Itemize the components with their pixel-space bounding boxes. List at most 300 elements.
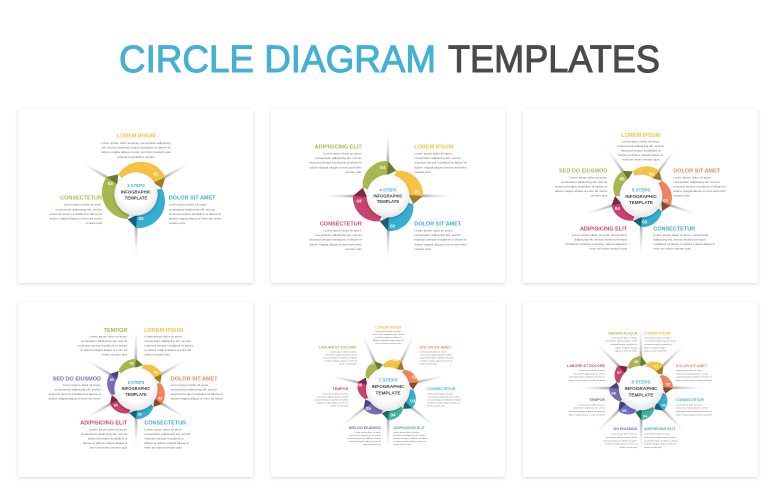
- text block: lorem ipsum: Lorem ipsum dolor sit amet,: [644, 336, 671, 339]
- text block: magna aliqua: labore et dolore magna: [615, 346, 638, 349]
- step numbers: 03: [662, 403, 666, 407]
- text block: lorem ipsum: Lorem ipsum dolor sit amet,: [622, 140, 660, 144]
- text block: lorem ipsum: LOREM IPSUM: [644, 332, 670, 336]
- text block: lorem ipsum: [414, 144, 467, 174]
- circle diagram: 7 steps: [325, 328, 449, 450]
- step numbers: 01: [154, 371, 158, 375]
- text block: consectetur: Lorem ipsum dolor sit amet,: [324, 228, 362, 232]
- text block: adipisicing elit: adipiscing elit, sed do eiusmod tempor: [574, 238, 627, 242]
- text block: dolor sit amet: Lorem ipsum dolor sit amet,: [676, 369, 703, 372]
- center label: [122, 380, 150, 397]
- text block: lorem ipsum: [644, 332, 677, 353]
- text block: dolor sit amet: Lorem ipsum dolor sit amet,: [673, 175, 712, 179]
- text block: dolor sit amet: DOLOR SIT AMET: [676, 364, 708, 368]
- step numbers: 05: [622, 409, 626, 413]
- text block: sed do eiusmod: eiusmod tempor incididunt ut labore: [347, 437, 382, 440]
- text block: sed do eiusmod: Lorem ipsum dolor sit amet,: [355, 431, 381, 434]
- segment 03: [129, 389, 153, 449]
- segment 02: [385, 361, 449, 395]
- text block: dolor sit amet: DOLOR SIT AMET: [169, 196, 216, 202]
- text block: adipisicing elit: consectetur adipiscing elit, sed do: [81, 432, 128, 436]
- text block: dolor sit amet: dolore magna aliqua ut enim ad minim: [676, 379, 712, 382]
- center label: TEMPLATE: [376, 390, 400, 396]
- text block: labore et dolore: minim veniam quis: [339, 363, 357, 365]
- segment 03: [66, 155, 145, 222]
- text block: adipisicing elit: [393, 426, 428, 446]
- step numbers: 01: [649, 171, 655, 176]
- text block: labore et dolore: eiusmod tempor incididunt ut labore et: [569, 376, 605, 379]
- segment 07: [348, 331, 394, 396]
- text block: lorem ipsum: eiusmod tempor incididunt ut labore et: [414, 161, 467, 165]
- text block: consectetur: eiusmod tempor incididunt ut labore et: [50, 212, 102, 216]
- step numbers: 04: [643, 414, 648, 418]
- text block: adipisicing elit: enim ad minim veniam quis: [590, 246, 627, 250]
- segment 05: [588, 142, 647, 208]
- center label: TEMPLATE: [125, 392, 147, 397]
- step numbers: 03: [108, 181, 113, 186]
- text block: dolor sit amet: dolore magna aliqua ut enim ad minim: [414, 242, 467, 246]
- text block: tempor: Lorem ipsum dolor sit amet,: [89, 335, 127, 339]
- text block: dolor sit amet: DOLOR SIT AMET: [414, 221, 462, 227]
- center label: INFOGRAPHIC: [625, 386, 658, 391]
- text block: sed do eiusmod: SED DO EIUSMOD: [349, 426, 381, 430]
- text block: do eiusmod: consectetur adipiscing elit, sed do: [605, 436, 638, 439]
- step numbers: 04: [615, 206, 620, 211]
- text block: consectetur: enim ad minim veniam quis: [144, 445, 182, 449]
- text block: sed do eiusmod: veniam quis: [591, 193, 608, 197]
- text block: lorem ipsum: consectetur adipiscing elit, sed do: [144, 339, 191, 343]
- step numbers: 03: [356, 199, 362, 204]
- text block: lorem ipsum: Lorem ipsum dolor sit amet,: [144, 335, 183, 339]
- text block: adipisicing elit: eiusmod tempor incididunt ut labore et: [309, 161, 362, 165]
- text block: consectetur: Lorem ipsum dolor sit amet,: [427, 392, 454, 395]
- text block: labore et dolore: LABORE ET DOLORE: [319, 345, 357, 349]
- circle diagram: 8 steps: [577, 324, 705, 452]
- text block: adipisicing elit: Lorem ipsum dolor sit amet,: [89, 427, 127, 431]
- text block: adipisicing elit: eiusmod tempor incididunt ut labore: [644, 439, 679, 442]
- segment 03: [384, 377, 445, 432]
- text block: sed do eiusmod: [49, 377, 101, 400]
- text block: sed do eiusmod: [555, 169, 608, 197]
- text block: do eiusmod: et dolore magna aliqua ut enim ad: [605, 443, 638, 446]
- text block: adipisicing elit: eiusmod tempor incididunt ut labore: [393, 437, 428, 440]
- text block: labore et dolore: consectetur adipiscing elit, sed do: [325, 353, 357, 356]
- step numbers: 03: [642, 220, 648, 225]
- circle diagram: 3 steps: [66, 137, 196, 258]
- step numbers: 07: [369, 361, 375, 366]
- text block: consectetur: CONSECTETUR: [427, 387, 456, 391]
- text block: consectetur: veniam quis: [85, 221, 102, 225]
- center label: [372, 378, 405, 396]
- step numbers: 01: [654, 364, 658, 368]
- text block: dolor sit amet: [169, 196, 222, 225]
- step numbers: [110, 362, 162, 417]
- title: CIRCLE DIAGRAM: [119, 39, 436, 81]
- text block: consectetur: eiusmod tempor incididunt ut labore et: [309, 238, 362, 242]
- step numbers: [615, 171, 669, 225]
- segment 04: [81, 383, 145, 434]
- panel: 7 steps: [271, 302, 505, 477]
- step numbers: 04: [114, 404, 118, 408]
- step numbers: 07: [617, 371, 621, 375]
- circle diagram: 6 steps: [75, 329, 197, 449]
- text block: labore et dolore: [567, 364, 606, 382]
- text block: consectetur: incididunt ut labore et dolore magna aliqua ut: [653, 242, 715, 246]
- text block: consectetur: consectetur adipiscing elit, sed do: [144, 432, 191, 436]
- step numbers: 01: [153, 172, 159, 177]
- text block: tempor: minim veniam quis: [102, 353, 128, 357]
- step numbers: 04: [390, 413, 396, 418]
- text block: lorem ipsum: labore et dolore magna aliqua ut: [373, 339, 404, 342]
- center circle: [114, 172, 158, 216]
- text block: consectetur: [309, 221, 362, 251]
- text block: lorem ipsum: eiusmod tempor incididunt ut: [621, 149, 661, 153]
- segment 07: [586, 339, 645, 397]
- segment 05: [592, 384, 650, 443]
- text block: lorem ipsum: consectetur adipiscing elit, sed do: [372, 333, 405, 336]
- panel: 5 steps: [523, 109, 758, 283]
- segment 04: [581, 188, 647, 235]
- text block: dolor sit amet: veniam quis: [169, 221, 186, 225]
- panel: 4 steps: [271, 109, 505, 283]
- text block: do eiusmod: eiusmod tempor incididunt ut labore: [603, 439, 638, 442]
- text block: tempor: TEMPOR: [104, 328, 127, 334]
- text block: lorem ipsum: consectetur adipiscing elit, sed do: [617, 144, 664, 148]
- text block: do eiusmod: DO EIUSMOD: [614, 427, 638, 431]
- segment 03: [637, 379, 696, 437]
- text block: dolor sit amet: eiusmod tempor incididunt ut labore et: [414, 238, 467, 242]
- segment 02: [639, 176, 706, 222]
- circle diagram: 5 steps: [581, 134, 706, 257]
- segment 04: [635, 388, 654, 452]
- text block: consectetur: CONSECTETUR: [60, 196, 102, 202]
- text block: adipisicing elit: [80, 421, 128, 449]
- text block: consectetur: [50, 196, 102, 225]
- text block: sed do eiusmod: minim veniam quis: [363, 444, 381, 446]
- text block: sed do eiusmod: dolore magna aliqua ut enim ad minim: [555, 189, 608, 193]
- step numbers: 08: [634, 360, 638, 364]
- panel: 8 steps: [523, 302, 758, 477]
- text block: labore et dolore: Lorem ipsum dolor sit amet,: [579, 369, 605, 372]
- step numbers: 06: [130, 362, 134, 366]
- step numbers: 05: [110, 378, 114, 382]
- step numbers: 02: [663, 198, 669, 203]
- text block: lorem ipsum: labore et dolore magna: [644, 346, 667, 349]
- text block: tempor: [78, 328, 128, 357]
- text block: dolor sit amet: DOLOR SIT AMET: [420, 345, 452, 349]
- center circle: [114, 367, 158, 411]
- text block: lorem ipsum: LOREM IPSUM: [117, 134, 156, 140]
- text block: consectetur: minim veniam quis: [427, 405, 445, 407]
- text block: lorem ipsum: [372, 326, 405, 345]
- text block: adipisicing elit: minim veniam quis: [393, 444, 411, 446]
- step numbers: 02: [158, 397, 162, 401]
- text block: lorem ipsum: dolore magna aliqua ut enim ad minim: [414, 165, 467, 169]
- title: TEMPLATES: [448, 39, 660, 81]
- text block: lorem ipsum: eiusmod tempor incididunt ut labore: [144, 344, 194, 348]
- text block: adipisicing elit: [644, 427, 679, 449]
- step numbers: 02: [666, 382, 670, 386]
- step numbers: 01: [393, 357, 399, 362]
- segment 01: [388, 171, 453, 204]
- text block: consectetur: CONSECTETUR: [676, 398, 704, 402]
- text block: sed do eiusmod: consectetur adipiscing elit, sed do: [349, 434, 382, 437]
- center label: TEMPLATE: [629, 393, 653, 398]
- center label: 5 STEPS: [632, 188, 650, 192]
- text block: dolor sit amet: veniam quis: [414, 247, 431, 251]
- text block: tempor: consectetur adipiscing elit, sed do: [316, 395, 349, 398]
- center label: 7 STEPS: [378, 378, 398, 382]
- text block: dolor sit amet: DOLOR SIT AMET: [673, 169, 721, 175]
- text block: tempor: eiusmod tempor incididunt ut labore et: [569, 410, 605, 413]
- text block: tempor: consectetur adipiscing elit, sed do: [573, 407, 606, 410]
- text block: adipisicing elit: consectetur adipiscing elit, sed do: [393, 434, 426, 437]
- step numbers: 03: [138, 413, 142, 417]
- text block: lorem ipsum: dolore magna aliqua ut enim ad minim veniam quis: [101, 150, 171, 154]
- text block: lorem ipsum: veniam quis: [414, 170, 431, 174]
- step numbers: 02: [412, 374, 418, 379]
- segment 03: [633, 196, 662, 257]
- text block: dolor sit amet: DOLOR SIT AMET: [171, 377, 218, 383]
- text block: consectetur: labore et dolore magna aliqua ut: [144, 441, 189, 445]
- text block: labore et dolore: et dolore magna aliqua ut enim ad: [324, 359, 358, 362]
- segment 04: [382, 389, 403, 450]
- step numbers: [356, 165, 420, 228]
- segment 05: [75, 353, 139, 404]
- text block: consectetur: et dolore magna aliqua ut enim ad: [427, 401, 460, 404]
- segment 01: [624, 134, 683, 201]
- text block: consectetur: Lorem ipsum dolor sit amet,: [144, 427, 183, 431]
- text block: lorem ipsum: LOREM IPSUM: [375, 326, 401, 330]
- text block: labore et dolore: [319, 345, 358, 365]
- segment 02: [641, 375, 705, 394]
- text block: dolor sit amet: consectetur adipiscing elit, sed do: [673, 180, 720, 184]
- text block: lorem ipsum: enim ad minim veniam quis: [622, 158, 660, 162]
- step numbers: 05: [366, 406, 371, 411]
- text block: magna aliqua: consectetur adipiscing elit, sed do: [605, 340, 638, 343]
- text block: sed do eiusmod: eiusmod tempor incididunt ut labore et: [49, 392, 101, 396]
- step numbers: 05: [619, 176, 625, 181]
- center label: TEMPLATE: [125, 195, 148, 200]
- text block: adipisicing elit: ADIPISICING ELIT: [393, 426, 426, 430]
- text block: lorem ipsum: Lorem ipsum dolor sit amet, consectetur adipiscing: [101, 141, 171, 145]
- text block: adipisicing elit: enim ad minim veniam quis: [90, 445, 128, 449]
- text block: labore et dolore: eiusmod tempor incididunt ut labore: [323, 356, 358, 359]
- text block: sed do eiusmod: Lorem ipsum dolor sit amet,: [569, 175, 607, 179]
- text block: lorem ipsum: aliqua ut enim ad minim: [644, 350, 667, 353]
- step numbers: 02: [138, 216, 144, 221]
- text block: adipisicing elit: veniam quis: [345, 170, 362, 174]
- text block: dolor sit amet: consectetur adipiscing elit, sed do: [414, 233, 461, 237]
- center label: [625, 188, 658, 205]
- text block: adipisicing elit: Lorem ipsum dolor sit amet,: [393, 431, 420, 434]
- text block: consectetur: dolore magna aliqua ut enim ad minim: [676, 413, 712, 416]
- center label: INFOGRAPHIC: [372, 384, 405, 389]
- text block: magna aliqua: MAGNA ALIQUA: [608, 332, 638, 336]
- text block: tempor: [314, 387, 349, 407]
- center circle: [366, 367, 410, 411]
- text block: sed do eiusmod: Lorem ipsum dolor sit amet,: [63, 383, 101, 387]
- text block: adipisicing elit: ADIPISICING ELIT: [644, 427, 676, 431]
- text block: consectetur: eiusmod tempor incididunt ut: [144, 436, 184, 440]
- segment 03: [323, 188, 388, 221]
- text block: do eiusmod: Lorem ipsum dolor sit amet,: [611, 433, 638, 436]
- text block: dolor sit amet: eiusmod tempor incididunt ut labore et: [169, 212, 221, 216]
- center label: 8 STEPS: [631, 379, 651, 384]
- text block: tempor: eiusmod tempor incididunt ut labore: [314, 398, 349, 401]
- text block: dolor sit amet: eiusmod tempor incididunt ut labore et: [171, 392, 223, 396]
- text block: lorem ipsum: consectetur adipiscing elit, sed do: [414, 156, 461, 160]
- text block: dolor sit amet: [676, 364, 712, 382]
- text block: consectetur: enim ad minim veniam quis: [653, 246, 691, 250]
- segment 01: [127, 344, 191, 395]
- step numbers: 02: [390, 223, 396, 228]
- center label: [121, 183, 151, 200]
- text block: sed do eiusmod: SED DO EIUSMOD: [559, 169, 607, 175]
- segment 02: [133, 374, 197, 425]
- segment 04: [363, 131, 396, 196]
- text block: consectetur: [427, 387, 462, 407]
- text block: dolor sit amet: eiusmod tempor incididunt ut labore et: [676, 376, 712, 379]
- text block: do eiusmod: minim veniam quis: [620, 447, 637, 449]
- text block: labore et dolore: Lorem ipsum dolor sit amet,: [330, 350, 357, 353]
- text block: dolor sit amet: Lorem ipsum dolor sit amet,: [171, 383, 209, 387]
- center label: INFOGRAPHIC: [121, 189, 151, 194]
- step numbers: [357, 357, 418, 418]
- step numbers: 01: [414, 189, 420, 194]
- text block: adipisicing elit: [309, 144, 362, 174]
- text block: adipisicing elit: ADIPISICING ELIT: [80, 421, 128, 427]
- center label: 4 STEPS: [379, 188, 397, 192]
- text block: consectetur: dolore magna aliqua ut enim ad minim: [309, 242, 362, 246]
- text block: adipisicing elit: incididunt ut labore et dolore magna aliqua ut: [565, 242, 627, 246]
- step numbers: 06: [357, 383, 363, 388]
- text block: dolor sit amet: dolore magna aliqua ut enim ad minim: [171, 396, 224, 400]
- text block: tempor: Lorem ipsum dolor sit amet,: [322, 392, 349, 395]
- text block: sed do eiusmod: consectetur adipiscing elit, sed do: [55, 388, 101, 392]
- text block: dolor sit amet: Lorem ipsum dolor sit amet,: [420, 350, 447, 353]
- text block: lorem ipsum: LOREM IPSUM: [144, 328, 184, 334]
- text block: sed do eiusmod: dolore magna aliqua ut enim ad minim: [49, 396, 101, 400]
- center label: TEMPLATE: [377, 199, 399, 204]
- center label: INFOGRAPHIC: [373, 194, 403, 198]
- text block: adipisicing elit: Lorem ipsum dolor sit amet, consectetur: [572, 233, 627, 237]
- text block: dolor sit amet: Lorem ipsum dolor sit amet,: [169, 203, 207, 207]
- text block: dolor sit amet: dolore magna aliqua ut enim ad minim: [673, 189, 726, 193]
- circle diagram: 4 steps: [323, 131, 453, 261]
- text block: tempor: minim veniam quis: [331, 405, 348, 407]
- text block: dolor sit amet: eiusmod tempor incididunt ut labore et: [673, 184, 726, 188]
- text block: lorem ipsum: consectetur adipiscing elit, sed do: [644, 340, 677, 343]
- title: [119, 39, 660, 81]
- segment 05: [336, 384, 397, 439]
- text block: consectetur: dolore magna aliqua ut enim ad minim: [50, 216, 102, 220]
- text block: labore et dolore: consectetur adipiscing elit, sed do: [573, 372, 606, 375]
- text block: lorem ipsum: LOREM IPSUM: [414, 144, 454, 150]
- text block: sed do eiusmod: SED DO EIUSMOD: [53, 377, 101, 383]
- text block: lorem ipsum: labore et dolore magna aliqua ut: [619, 153, 663, 157]
- text block: dolor sit amet: [673, 169, 726, 197]
- segment 01: [632, 333, 690, 392]
- text block: adipisicing elit: eiusmod tempor incididunt ut: [88, 436, 127, 440]
- step numbers: [612, 360, 670, 418]
- segment 08: [628, 324, 647, 388]
- text block: do eiusmod: [603, 427, 638, 449]
- text block: dolor sit amet: consectetur adipiscing elit, sed do: [420, 353, 453, 356]
- text block: consectetur: veniam quis: [345, 247, 362, 251]
- text block: magna aliqua: Lorem ipsum dolor sit amet,: [611, 336, 638, 339]
- text block: consectetur: consectetur adipiscing elit, sed do: [315, 233, 362, 237]
- text block: adipisicing elit: minim veniam quis: [644, 447, 662, 449]
- text block: adipisicing elit: consectetur adipiscing elit, sed do: [644, 436, 677, 439]
- text block: adipisicing elit: ADIPISICING ELIT: [580, 226, 628, 232]
- text block: sed do eiusmod: et dolore magna aliqua ut enim ad: [349, 440, 382, 443]
- center label: TEMPLATE: [629, 200, 653, 205]
- segment 02: [380, 196, 413, 261]
- text block: tempor: TEMPOR: [333, 387, 349, 391]
- center label: [625, 379, 658, 398]
- text block: dolor sit amet: dolore magna aliqua ut enim ad minim: [169, 216, 222, 220]
- text block: lorem ipsum: elit, sed do eiusmod tempor incididunt ut labore et: [102, 146, 170, 150]
- text block: lorem ipsum: eiusmod tempor incididunt ut: [644, 343, 672, 346]
- text block: consectetur: eiusmod tempor incididunt ut labore et: [676, 410, 712, 413]
- segment 06: [325, 369, 389, 404]
- panel: 6 steps: [18, 302, 253, 477]
- text block: dolor sit amet: et dolore magna aliqua ut enim ad: [420, 359, 453, 362]
- text block: adipisicing elit: et dolore magna aliqua ut enim ad: [393, 440, 426, 443]
- text block: dolor sit amet: [414, 221, 467, 251]
- text block: adipisicing elit: dolore magna aliqua ut enim ad minim: [309, 165, 362, 169]
- text block: tempor: TEMPOR: [589, 398, 605, 402]
- text block: dolor sit amet: consectetur adipiscing elit, sed do: [171, 388, 217, 392]
- text block: labore et dolore: LABORE ET DOLORE: [567, 364, 606, 368]
- text block: adipisicing elit: ADIPISICING ELIT: [315, 144, 362, 150]
- text block: adipisicing elit: labore et dolore magna aliqua ut: [83, 441, 127, 445]
- text block: consectetur: consectetur adipiscing elit, sed do: [56, 207, 102, 211]
- text block: dolor sit amet: Lorem ipsum dolor sit amet,: [414, 228, 453, 232]
- text block: lorem ipsum: Lorem ipsum dolor sit amet,: [414, 152, 453, 156]
- text block: consectetur: Lorem ipsum dolor sit amet,: [676, 403, 703, 406]
- text block: adipisicing elit: [565, 226, 628, 250]
- text block: magna aliqua: eiusmod tempor incididunt ut: [610, 343, 638, 346]
- text block: tempor: et dolore magna aliqua ut enim ad: [316, 401, 349, 404]
- text block: dolor sit amet: consectetur adipiscing elit, sed do: [169, 207, 215, 211]
- text block: adipisicing elit: Lorem ipsum dolor sit amet,: [324, 152, 362, 156]
- step numbers: 03: [410, 399, 416, 404]
- text block: consectetur: [144, 421, 191, 449]
- text block: dolor sit amet: eiusmod tempor incididunt ut labore: [420, 356, 454, 359]
- text block: lorem ipsum: Lorem ipsum dolor sit amet,: [375, 330, 402, 333]
- center circle: [619, 366, 663, 410]
- text block: adipisicing elit: et dolore magna aliqua ut enim ad: [644, 443, 677, 446]
- segment 01: [374, 328, 420, 392]
- center label: [373, 188, 403, 204]
- text block: adipisicing elit: Lorem ipsum dolor sit amet,: [644, 433, 671, 436]
- text block: lorem ipsum: eiusmod tempor incididunt ut: [375, 336, 402, 339]
- center circle: [620, 174, 662, 218]
- text block: consectetur: Lorem ipsum dolor sit amet,: [64, 203, 102, 207]
- text block: lorem ipsum: enim ad minim veniam quis: [375, 343, 401, 345]
- text block: consectetur: [653, 226, 715, 250]
- text block: consectetur: consectetur adipiscing elit, sed do: [427, 395, 460, 398]
- step numbers: [108, 172, 159, 221]
- text block: consectetur: consectetur adipiscing elit, sed do: [676, 407, 709, 410]
- text block: consectetur: adipiscing elit, sed do eiusmod tempor: [653, 238, 706, 242]
- panel: 3 steps: [18, 109, 253, 283]
- center label: 3 STEPS: [127, 183, 145, 188]
- text block: consectetur: [676, 398, 712, 416]
- text block: dolor sit amet: minim veniam quis: [420, 363, 437, 365]
